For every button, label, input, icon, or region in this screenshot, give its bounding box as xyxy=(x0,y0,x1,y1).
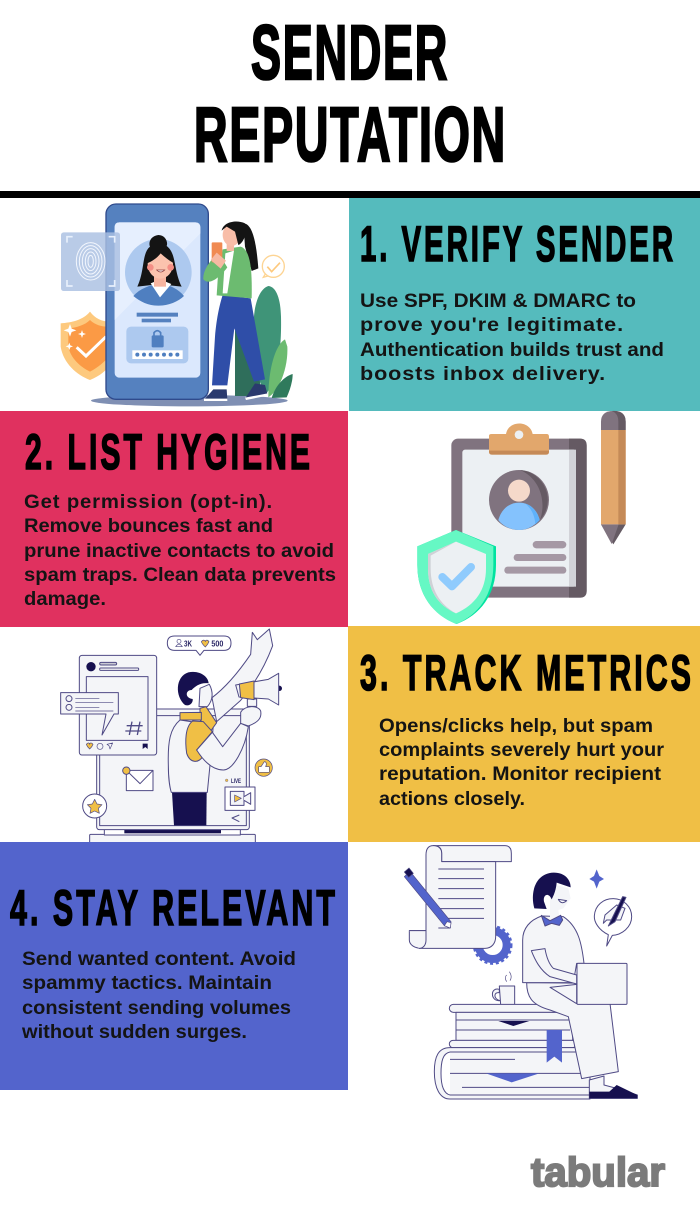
thumbs up badge xyxy=(255,759,272,776)
text: verify sender body: boosts inbox delivery. xyxy=(360,363,606,385)
laptop frame xyxy=(90,709,255,843)
text: track metrics body: reputation. Monitor recipient xyxy=(379,763,662,785)
panel: 2 list hygiene xyxy=(0,411,348,627)
panel: 3 track metrics xyxy=(348,626,700,842)
logo: tabular: tabular xyxy=(531,1149,665,1195)
icon: writing bubble xyxy=(594,897,632,946)
text: list hygiene body: Remove bounces fast and xyxy=(24,515,273,537)
woman xyxy=(203,221,268,401)
woman xyxy=(523,873,637,1098)
title: SENDER xyxy=(251,10,449,96)
heading: 4. stay relevant: 4. STAY RELEVANT xyxy=(10,880,338,936)
heading: 2. list hygiene: 2. LIST HYGIENE xyxy=(25,424,313,480)
text: track metrics body: Opens/clicks help, but spam xyxy=(379,715,653,737)
live video card: LIVE xyxy=(231,778,241,785)
text: verify sender body: prove you're legitimate. xyxy=(360,314,624,336)
panel: 1 verify sender xyxy=(349,198,700,411)
sparkle xyxy=(589,869,604,889)
man xyxy=(168,629,273,825)
text: stay relevant body: Send wanted content. Avoid xyxy=(22,948,296,970)
illustration: woman on books with laptop xyxy=(404,846,637,1099)
text: track metrics body: complaints severely hurt your xyxy=(379,739,664,761)
text: verify sender body xyxy=(360,290,664,385)
megaphone xyxy=(236,673,282,706)
text: list hygiene body: prune inactive contacts to avoid xyxy=(24,540,334,562)
text: verify sender body: Use SPF, DKIM & DMARC to xyxy=(360,290,636,312)
text: list hygiene body: spam traps. Clean data prevents xyxy=(24,564,336,586)
title: REPUTATION xyxy=(194,92,507,178)
email icon xyxy=(123,767,153,791)
icon: plant xyxy=(235,286,293,398)
text: list hygiene body: Get permission (opt-in). xyxy=(24,491,273,513)
title xyxy=(194,10,507,178)
pencil xyxy=(601,411,626,544)
coffee cup xyxy=(492,972,515,1005)
books xyxy=(434,1004,590,1099)
text: verify sender body: Authentication builds trust and xyxy=(360,339,664,361)
live video card xyxy=(225,778,255,822)
social post card xyxy=(61,655,157,755)
shield xyxy=(417,530,496,624)
clipboard xyxy=(451,423,587,598)
pencil xyxy=(404,868,451,928)
text: track metrics body: actions closely. xyxy=(379,788,525,810)
text: stay relevant body: spammy tactics. Maintain xyxy=(22,972,272,994)
text: stay relevant body: consistent sending volumes xyxy=(22,997,291,1019)
stats bubble: 3K xyxy=(184,640,192,649)
icon: fingerprint xyxy=(61,232,120,291)
scroll document xyxy=(409,846,511,948)
stats bubble: 500 xyxy=(211,640,224,649)
illustration: clipboard profile with shield and pencil xyxy=(417,411,626,624)
icon: check bubble xyxy=(262,255,284,277)
gear xyxy=(474,927,511,963)
text: stay relevant body: without sudden surges. xyxy=(21,1021,247,1043)
star badge xyxy=(83,794,107,818)
text: stay relevant body xyxy=(21,948,296,1043)
panel: 4 stay relevant xyxy=(0,842,348,1090)
icon: shield orange xyxy=(61,312,110,380)
stats bubble xyxy=(167,636,231,655)
text: list hygiene body xyxy=(24,491,336,610)
text: track metrics body xyxy=(379,715,664,810)
phone xyxy=(106,204,208,399)
illustration: man with megaphone and social media xyxy=(61,629,282,843)
text: list hygiene body: damage. xyxy=(24,588,106,610)
illustration: woman with phone login xyxy=(61,204,293,406)
